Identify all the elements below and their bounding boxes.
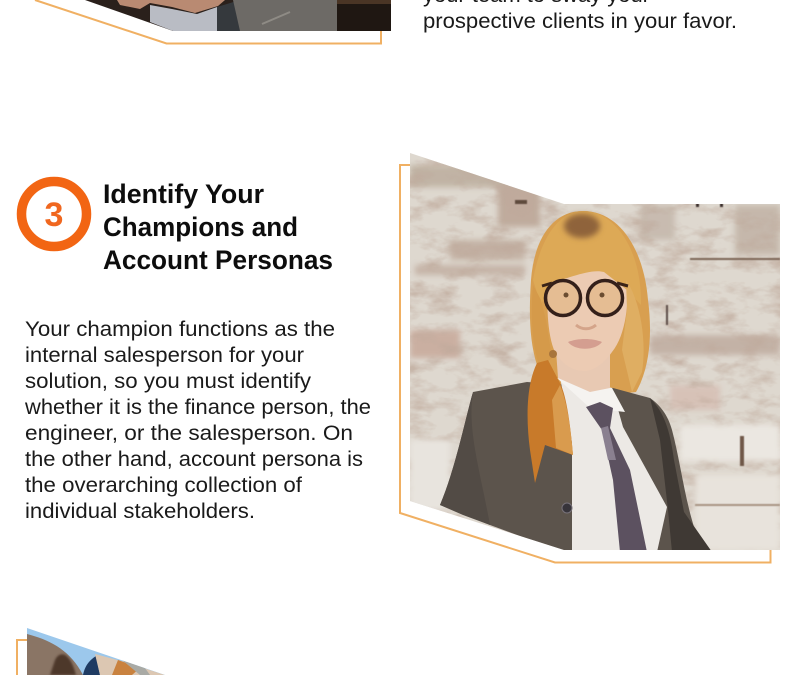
orange frame: woman photo	[400, 165, 770, 562]
heading: step 3	[103, 179, 333, 275]
heading: step 3: Champions and	[103, 212, 298, 242]
face	[548, 271, 627, 354]
jacket	[440, 382, 712, 552]
text block: step 3 description: internal salesperson for your	[25, 344, 304, 367]
fringe	[533, 211, 641, 305]
photo: top cropped business people	[85, 0, 391, 31]
text block: step 3 description: individual stakeholders.	[25, 500, 255, 523]
text block: end of step 2 description: prospective clients in your favor.	[423, 10, 737, 33]
photo: bottom cropped hands	[27, 628, 167, 675]
orange frame: bottom photo	[17, 640, 27, 675]
shirt	[560, 377, 667, 552]
heading: step 3: Account Personas	[103, 245, 333, 275]
wall texture	[410, 150, 780, 552]
text block: end of step 2 description	[423, 0, 737, 33]
text block: step 3 description: whether it is the finance person, the	[24, 396, 371, 419]
text block: step 3 description: the overarching collection of	[25, 474, 302, 497]
icon: step number 3 badge	[22, 182, 86, 246]
orange frame: top photo	[35, 0, 381, 44]
nose and mouth	[576, 325, 596, 329]
glasses	[546, 280, 622, 316]
text block: step 3 description: Your champion functions as the	[25, 318, 335, 341]
side hair	[622, 280, 644, 392]
photo: woman in suit against brick wall	[410, 150, 780, 552]
icon: step number 3 badge: 3	[45, 196, 63, 234]
tie	[586, 402, 647, 552]
neck	[556, 354, 610, 392]
text block: step 3 description: the other hand, account persona is	[25, 448, 363, 471]
hair back	[530, 211, 650, 395]
ponytail	[528, 360, 573, 483]
text block: step 3 description: solution, so you must identify	[25, 370, 312, 393]
text block: step 3 description: engineer, or the salesperson. On	[25, 422, 353, 445]
button	[562, 503, 572, 513]
heading: step 3: Identify Your	[103, 179, 264, 209]
text block: step 3 description	[24, 318, 371, 523]
